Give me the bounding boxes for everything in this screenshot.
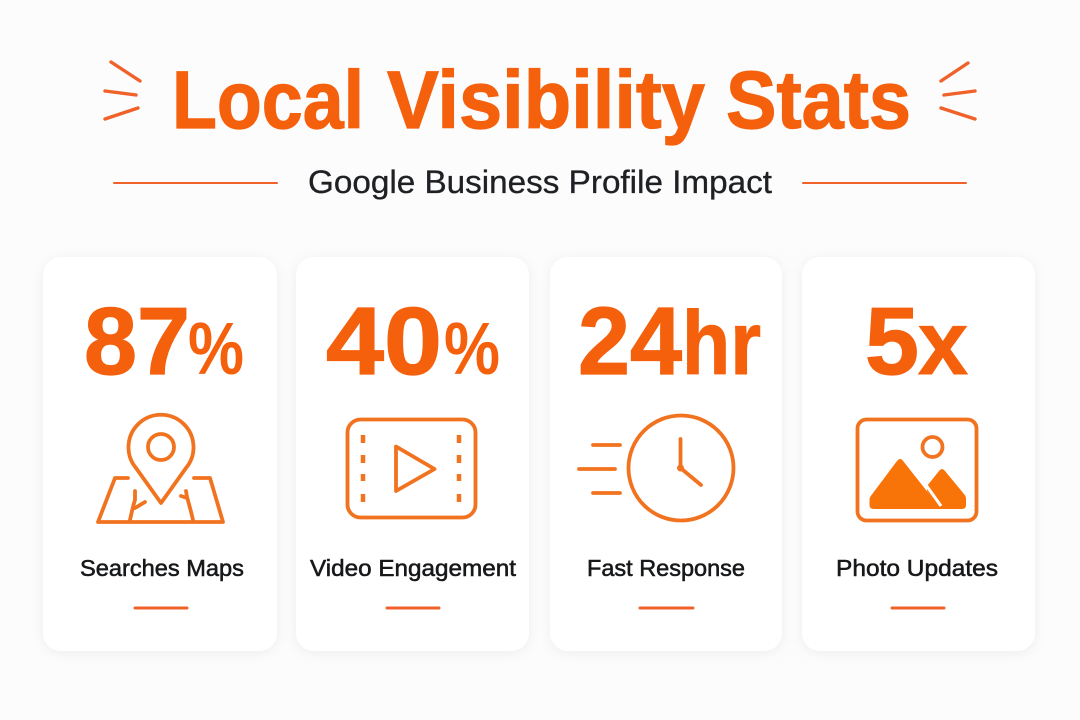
icon: video player <box>348 420 476 518</box>
stat: 24hr: hr <box>682 294 761 394</box>
panel: searches maps <box>43 257 277 651</box>
stat: 5x: x <box>918 294 968 394</box>
subtitle rule right <box>803 182 966 184</box>
stat: 87%: 87 <box>84 288 190 395</box>
header: title block <box>105 55 975 200</box>
stat: 40%: % <box>444 307 500 390</box>
accent line <box>135 606 187 610</box>
stat: 24hr <box>578 288 761 395</box>
stat: 87%: % <box>188 307 244 390</box>
icon: map pin <box>98 415 223 522</box>
title: Visibility <box>387 55 705 146</box>
label: Searches Maps <box>80 555 244 581</box>
title: Local <box>172 55 364 146</box>
stat: 87% <box>84 288 244 395</box>
label: Video Engagement <box>310 555 517 581</box>
title: Stats <box>726 55 911 146</box>
stat: 5x: 5 <box>865 288 919 395</box>
subtitle: Google Business Profile Impact <box>308 164 772 200</box>
panel: fast response <box>550 257 782 651</box>
stat: 40% <box>326 288 500 395</box>
panel: video engagement <box>296 257 529 651</box>
icon: clock with speed lines <box>579 416 734 520</box>
label: Photo Updates <box>836 555 998 581</box>
accent line <box>892 606 944 610</box>
stat: 5x <box>865 288 968 395</box>
subtitle rule left <box>114 182 277 184</box>
icon: photo frame <box>858 420 976 520</box>
icon: right sparkle lines <box>941 63 975 119</box>
icon: left sparkle lines <box>105 62 140 119</box>
panel: photo updates <box>802 257 1035 651</box>
accent line <box>387 606 439 610</box>
stat: 24hr: 24 <box>578 288 682 395</box>
title <box>172 55 911 146</box>
accent line <box>640 606 693 610</box>
label: Fast Response <box>587 555 745 581</box>
stat: 40%: 40 <box>326 288 442 395</box>
